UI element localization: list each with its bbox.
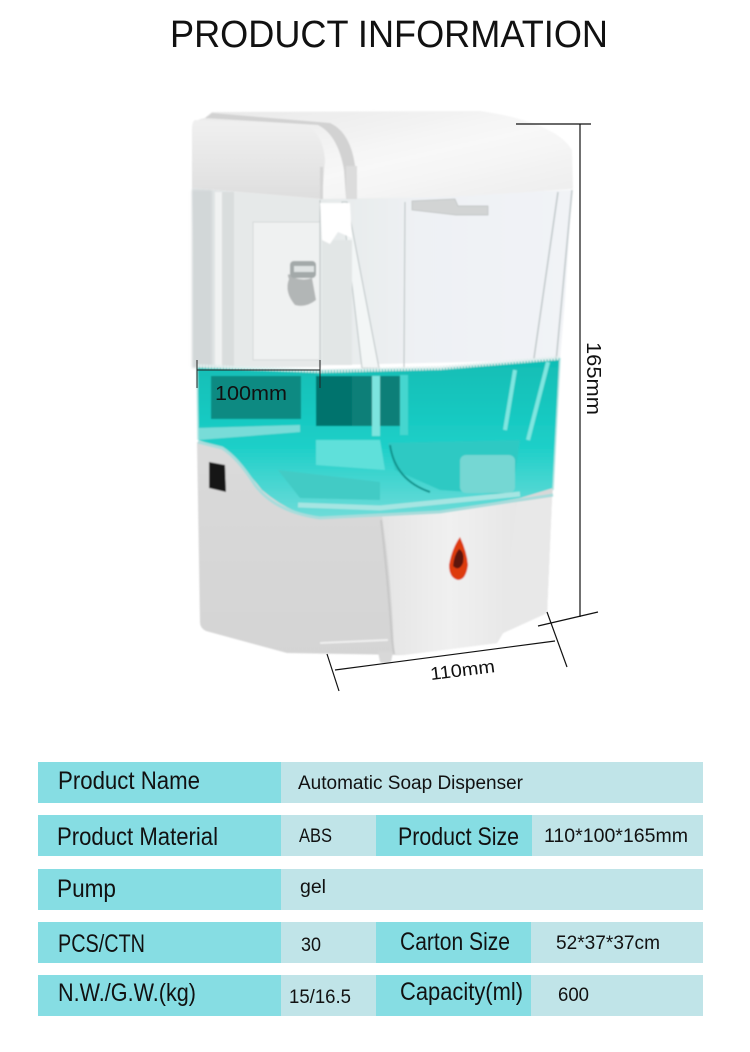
row: pcs and carton size: 52*37*37cm <box>556 933 660 954</box>
red indicator light <box>449 537 468 580</box>
row: pcs and carton size: PCS/CTN <box>58 930 145 958</box>
dimension: 165mm height <box>516 124 604 617</box>
top cap <box>192 111 573 199</box>
row: material and size <box>38 815 703 856</box>
row: weight and capacity: 15/16.5 <box>289 987 351 1008</box>
row: weight and capacity: Capacity(ml) <box>400 978 523 1006</box>
dimension: 100mm width <box>197 360 320 405</box>
row: pcs and carton size: 30 <box>301 935 321 956</box>
row: product name: Automatic Soap Dispenser <box>298 773 524 794</box>
row: material and size: Product Material <box>57 823 218 851</box>
row: pump <box>38 869 703 910</box>
spec table <box>38 762 703 1016</box>
row: product name: Product Name <box>58 767 200 795</box>
row: weight and capacity <box>38 975 703 1016</box>
wall mount knob <box>287 261 316 306</box>
tank upper clear section <box>192 188 572 368</box>
base housing <box>197 442 553 664</box>
row: weight and capacity: 600 <box>558 985 589 1006</box>
dimension: 110mm depth: 110mm <box>429 656 496 684</box>
row: pump: Pump <box>57 875 116 903</box>
nozzle bracket <box>412 199 488 215</box>
row: pump: gel <box>300 877 326 898</box>
dimension: 165mm height: 165mm <box>582 342 604 415</box>
row: weight and capacity: N.W./G.W.(kg) <box>58 979 196 1007</box>
row: product name <box>38 762 703 803</box>
sensor window <box>209 462 226 492</box>
tank water section <box>197 358 560 518</box>
row: pcs and carton size: Carton Size <box>400 928 510 956</box>
row: material and size: ABS <box>299 826 332 847</box>
row: material and size: Product Size <box>398 823 519 851</box>
dimension: 110mm depth <box>327 612 598 691</box>
dimension: 100mm width: 100mm <box>215 383 287 405</box>
row: material and size: 110*100*165mm <box>544 826 688 847</box>
row: pcs and carton size <box>38 922 703 963</box>
product photo: soap dispenser <box>192 111 573 664</box>
title: PRODUCT INFORMATION <box>170 14 608 56</box>
